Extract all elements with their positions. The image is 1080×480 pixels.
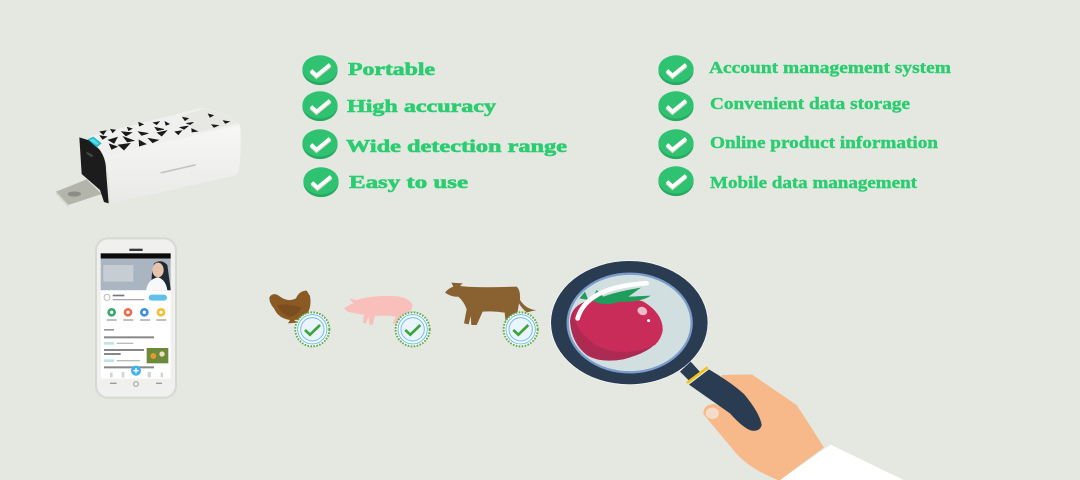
pig badge [396, 312, 430, 346]
feature: Portable: Portable [348, 59, 435, 79]
feature: Mobile data management: Mobile data management [710, 173, 918, 192]
screen banner [101, 259, 171, 290]
animals with approval badges [269, 283, 538, 346]
feature: Portable [302, 55, 435, 85]
hand [703, 374, 824, 480]
cow badge [504, 312, 538, 346]
feature: Convenient data storage: Convenient data storage [710, 94, 910, 113]
phone with app screen [96, 238, 176, 398]
screen content [101, 290, 171, 379]
hand holding magnifying glass over tomato [550, 260, 905, 480]
cow [445, 283, 537, 325]
left feature list [302, 55, 567, 197]
hen badge [295, 312, 329, 346]
device: portable detector [56, 108, 241, 207]
feature: Wide detection range [302, 129, 567, 159]
screen status bar [101, 253, 171, 259]
infographic canvas [56, 55, 951, 480]
feature: Wide detection range: Wide detection range [346, 136, 567, 156]
feature: Easy to use [303, 167, 468, 197]
feature: Account management system [658, 55, 951, 85]
feature: Online product information: Online product information [710, 133, 938, 152]
feature: Account management system: Account management system [709, 58, 951, 77]
feature: Easy to use: Easy to use [349, 172, 468, 192]
feature: High accuracy [302, 91, 496, 121]
feature: Convenient data storage [658, 91, 910, 121]
right feature list [658, 55, 951, 196]
magnifier lens and tomato [550, 260, 708, 385]
sleeve [779, 445, 905, 480]
magnifier handle [680, 362, 762, 431]
feature: Online product information [658, 129, 938, 159]
pig [344, 296, 413, 325]
thumbnail [706, 408, 719, 419]
feature: Mobile data management [658, 166, 918, 196]
hen [269, 291, 310, 323]
feature: High accuracy: High accuracy [347, 96, 496, 116]
